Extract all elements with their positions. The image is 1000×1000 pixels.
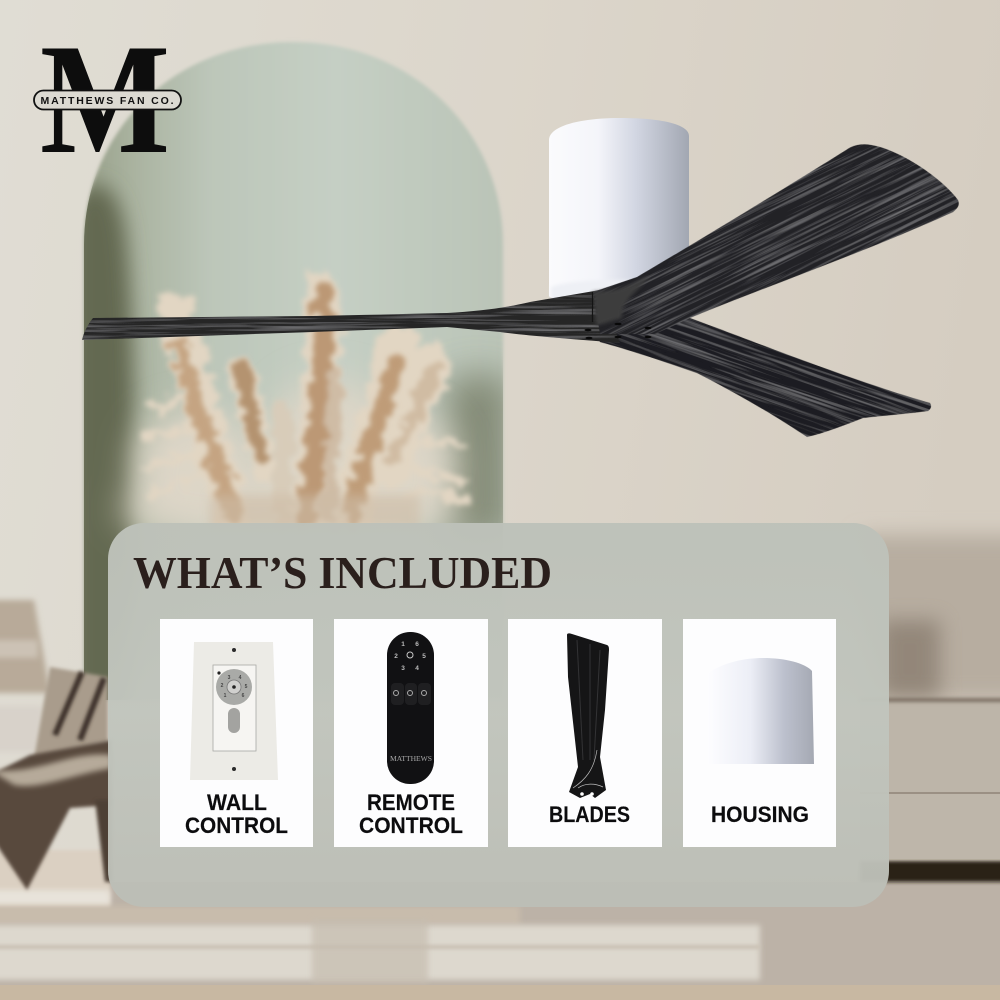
label: remote control: CONTROL — [359, 813, 463, 838]
card: wall control — [160, 619, 313, 847]
icon: remote control — [387, 632, 434, 784]
card: blades — [508, 619, 662, 847]
pampas grass — [120, 290, 468, 542]
fan blade: left — [82, 290, 620, 343]
brand logo — [34, 12, 181, 187]
heading: WHAT’S INCLUDED — [133, 547, 552, 598]
label: housing: HOUSING — [711, 802, 809, 827]
icon: remote control: 3 — [401, 665, 405, 672]
icon: remote control: 4 — [415, 665, 419, 672]
icon: remote control: 6 — [415, 641, 419, 648]
icon: remote control: 5 — [422, 653, 426, 660]
fan blade: right upper — [518, 0, 1000, 478]
logo name pill — [34, 90, 181, 110]
fan hub — [584, 276, 652, 339]
icon: wall control: 4 — [239, 675, 242, 681]
ceiling fan — [82, 0, 1000, 542]
label: blades: BLADES — [549, 802, 630, 827]
icon: housing — [708, 658, 814, 764]
label: remote control: REMOTE — [367, 790, 455, 815]
fan blade: right lower — [548, 195, 973, 542]
icon: remote control: 2 — [394, 653, 398, 660]
icon: remote control: MATTHEWS — [390, 755, 432, 763]
label: remote control — [359, 790, 463, 838]
label: wall control — [185, 790, 288, 838]
label: wall control: WALL — [207, 790, 267, 815]
icon: wall control — [190, 642, 278, 780]
panel: what's included — [108, 523, 889, 907]
icon: wall control: 1 — [224, 693, 227, 699]
card: remote control — [334, 619, 488, 847]
icon: wall control: 6 — [242, 693, 245, 699]
card: housing — [683, 619, 836, 847]
fan housing — [549, 118, 689, 300]
floor — [0, 850, 1000, 1000]
icon: wall control: 3 — [228, 675, 231, 681]
green arched niche — [70, 42, 510, 720]
logo monogram M: M — [40, 12, 170, 187]
left sofa and throw — [0, 600, 112, 890]
icon: wall control: 2 — [221, 683, 224, 689]
icon: remote control: 1 — [401, 641, 405, 648]
logo name text: MATTHEWS FAN CO. — [40, 95, 174, 107]
label: wall control: CONTROL — [185, 813, 288, 838]
right sofa — [860, 535, 1000, 859]
icon: blade — [567, 633, 609, 798]
icon: wall control: 5 — [245, 684, 248, 690]
